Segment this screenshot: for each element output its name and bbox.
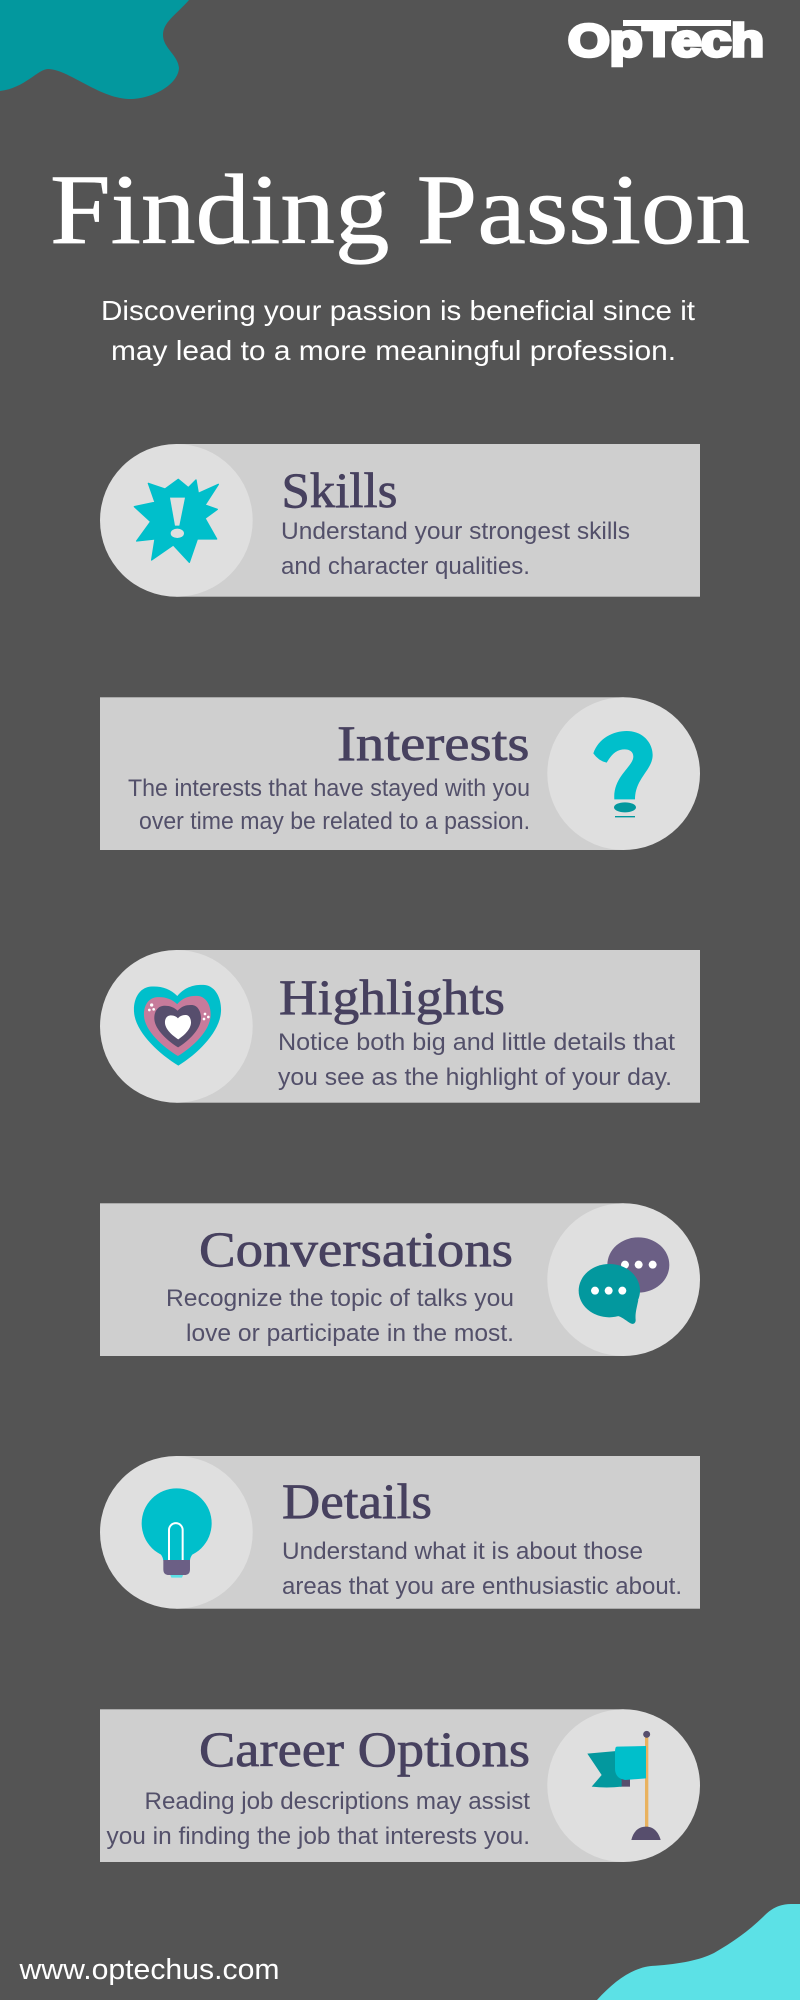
description: highlights: you see as the highlight of your day.	[278, 1064, 672, 1091]
heading: Interests: Interests	[337, 715, 530, 771]
description: interests: over time may be related to a passion.	[139, 808, 530, 835]
description: interests: The interests that have stayed with you	[128, 775, 530, 802]
heading: Conversations: Conversations	[199, 1221, 513, 1277]
icon: chat bubbles	[579, 1237, 669, 1324]
panel: interests	[100, 697, 700, 850]
decorative blob: bottom right	[597, 1904, 800, 2000]
description: skills	[281, 518, 630, 580]
title: Finding Passion	[50, 154, 750, 265]
panel: details	[100, 1456, 700, 1609]
intro text: Discovering your passion is beneficial since it	[101, 295, 695, 326]
description: career options: Reading job descriptions may assist	[144, 1788, 530, 1815]
description: interests	[128, 775, 530, 835]
heading: Highlights: Highlights	[279, 969, 505, 1025]
description: details	[282, 1538, 682, 1600]
decorative blob: top left	[0, 0, 189, 99]
description: skills: Understand your strongest skills	[281, 518, 630, 545]
icon: burst with exclamation mark	[134, 479, 218, 562]
description: highlights	[278, 1029, 675, 1091]
heading: Skills: Skills	[282, 462, 398, 518]
description: skills: and character qualities.	[281, 553, 530, 580]
panel: career options	[100, 1709, 700, 1862]
logo: OpTech: OpTech	[568, 15, 764, 66]
description: details: Understand what it is about those	[282, 1538, 643, 1565]
intro text: may lead to a more meaningful profession.	[111, 335, 676, 366]
description: career options	[106, 1788, 530, 1850]
description: conversations: Recognize the topic of talks you	[166, 1285, 514, 1312]
intro text	[101, 295, 695, 366]
panel: conversations	[100, 1203, 700, 1356]
icon: light bulb	[142, 1488, 212, 1578]
description: career options: you in finding the job that interests you.	[106, 1823, 530, 1850]
heading: Career Options: Career Options	[199, 1721, 530, 1777]
panel: skills	[100, 444, 700, 597]
icon: layered heart	[134, 985, 221, 1066]
description: conversations: love or participate in the most.	[186, 1320, 514, 1347]
panel: highlights	[100, 950, 700, 1103]
description: conversations	[166, 1285, 514, 1347]
heading: Details: Details	[282, 1473, 432, 1529]
website url: www.optechus.com	[18, 1954, 279, 1986]
icon: flag on pole	[587, 1731, 661, 1840]
icon: question mark	[593, 731, 653, 817]
description: highlights: Notice both big and little details that	[278, 1029, 675, 1056]
description: details: areas that you are enthusiastic about.	[282, 1573, 682, 1600]
